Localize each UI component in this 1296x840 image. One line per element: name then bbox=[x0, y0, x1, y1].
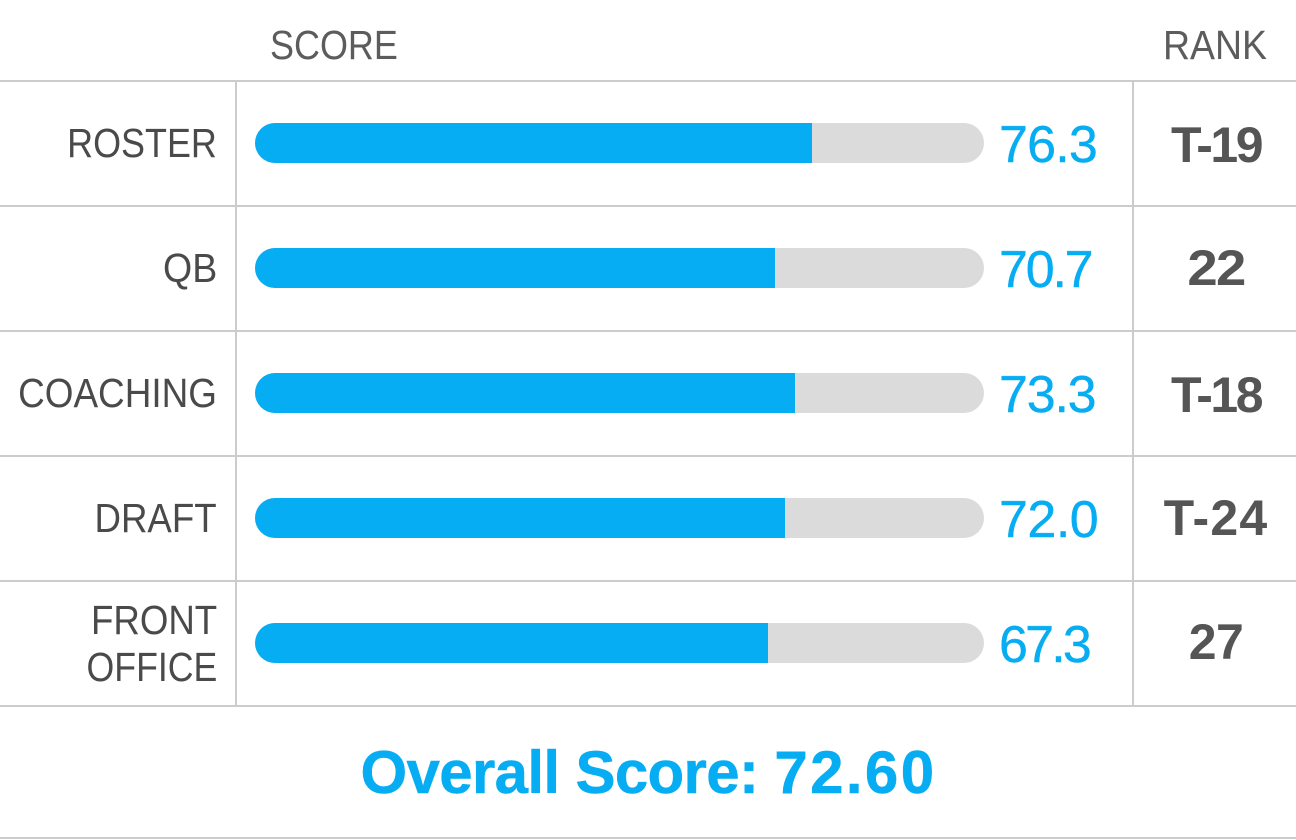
heading: rank column: RANK bbox=[1163, 22, 1267, 68]
row label: draft: DRAFT bbox=[95, 495, 217, 541]
row label: roster: ROSTER bbox=[67, 120, 217, 166]
rank: front office: 27 bbox=[1189, 614, 1243, 670]
overall score: Overall Score: 72.60 bbox=[361, 739, 936, 806]
row label: qb: QB bbox=[163, 245, 217, 291]
bar: qb bbox=[255, 248, 984, 288]
bar: draft bbox=[255, 498, 984, 538]
bar: front office bbox=[255, 623, 984, 663]
rank: draft: T-24 bbox=[1164, 490, 1268, 546]
bar: roster bbox=[255, 123, 984, 163]
row label: front office: OFFICE bbox=[86, 644, 217, 690]
row label: front office bbox=[86, 597, 217, 690]
bar: coaching bbox=[255, 373, 984, 413]
rank: qb: 22 bbox=[1187, 240, 1245, 296]
rank: coaching: T-18 bbox=[1171, 367, 1261, 423]
score: coaching: 73.3 bbox=[999, 366, 1095, 424]
row label: front office: FRONT bbox=[91, 597, 217, 643]
score: qb: 70.7 bbox=[999, 241, 1091, 299]
heading: score column: SCORE bbox=[270, 22, 398, 68]
row label: coaching: COACHING bbox=[18, 370, 217, 416]
score: front office: 67.3 bbox=[999, 616, 1089, 674]
score: draft: 72.0 bbox=[999, 491, 1098, 549]
score: roster: 76.3 bbox=[999, 116, 1097, 174]
rank: roster: T-19 bbox=[1171, 117, 1261, 173]
